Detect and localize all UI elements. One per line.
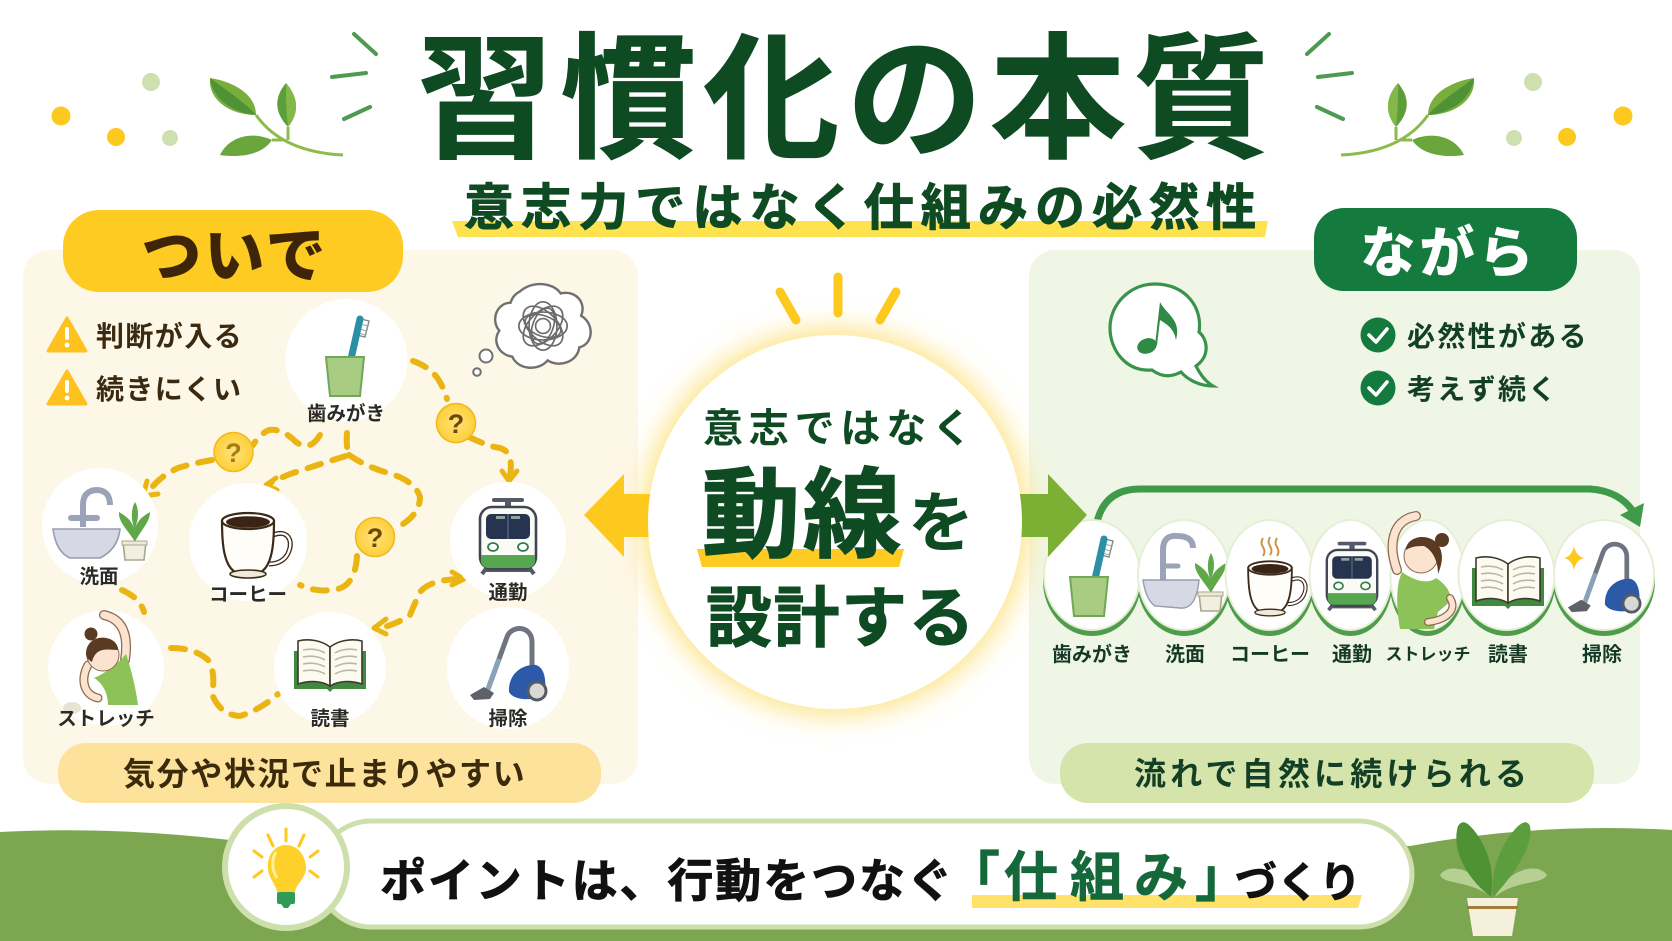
question mark 2 bbox=[214, 432, 253, 472]
flow node: 洗面 bbox=[1138, 520, 1230, 630]
icon: light bulb bbox=[225, 806, 347, 928]
subtitle highlight bbox=[452, 221, 1268, 237]
warning item 2 bbox=[48, 371, 242, 405]
node: ストレッチ bbox=[48, 610, 164, 730]
node: ストレッチ: ストレッチ bbox=[57, 708, 155, 730]
flow node: ストレッチ bbox=[1390, 516, 1464, 630]
icon: tangled thought cloud bbox=[473, 284, 591, 376]
arrow: right to ながら bbox=[1019, 474, 1087, 557]
node: 洗面: 洗面 bbox=[79, 566, 119, 588]
icon: right leaf sprig bbox=[1341, 78, 1474, 156]
question mark 3: ? bbox=[367, 523, 383, 553]
check item 2: 考えず続く bbox=[1407, 374, 1559, 405]
center circle message bbox=[648, 277, 1022, 709]
flow labels: 掃除 bbox=[1582, 643, 1622, 666]
node: 通勤 bbox=[450, 482, 566, 604]
highlight under 動線 bbox=[697, 549, 904, 567]
panel: ついで bbox=[23, 210, 638, 803]
decoration: title rays left bbox=[332, 34, 376, 119]
flow labels: 歯みがき bbox=[1052, 642, 1132, 666]
decoration: title rays right bbox=[1307, 34, 1352, 119]
question mark 2: ? bbox=[225, 438, 242, 468]
flow node: コーヒー bbox=[1226, 520, 1314, 630]
flow node: 掃除 bbox=[1554, 520, 1654, 630]
panel background bbox=[1029, 250, 1640, 784]
flow labels bbox=[1052, 642, 1622, 666]
center glow bbox=[641, 328, 1029, 716]
flow labels: 読書 bbox=[1488, 643, 1528, 666]
warning item 2: 続きにくい bbox=[96, 374, 242, 405]
caption: 気分や状況で止まりやすい bbox=[58, 743, 601, 803]
node: 通勤: 通勤 bbox=[488, 582, 528, 604]
heading: ついで bbox=[63, 210, 403, 292]
flow labels: ストレッチ bbox=[1386, 645, 1470, 664]
panel: ながら bbox=[1029, 208, 1655, 803]
heading: ついで: ついで bbox=[141, 223, 329, 290]
node: 読書 bbox=[274, 612, 386, 730]
bottom green ground band bbox=[0, 828, 1672, 941]
flow node: 読書 bbox=[1458, 520, 1554, 630]
footer key word: 「仕組み」 bbox=[946, 848, 1249, 908]
node: 歯みがき: 歯みがき bbox=[307, 402, 385, 425]
line 2 particle: を bbox=[908, 486, 974, 560]
line 2: 動線 bbox=[702, 460, 904, 570]
caption: 流れで自然に続けられる bbox=[1060, 743, 1594, 803]
flow node: 通勤 bbox=[1310, 520, 1392, 630]
arrow: left to ついで bbox=[584, 474, 652, 557]
decoration: right sparkle dots bbox=[1506, 73, 1632, 146]
flow arrow over the row bbox=[1097, 489, 1644, 527]
icon: left leaf sprig bbox=[210, 78, 343, 156]
question mark 3 bbox=[356, 518, 394, 556]
line 1: 意志ではなく bbox=[703, 407, 978, 451]
flow node: 歯みがき bbox=[1044, 520, 1140, 630]
route: tangled dashed paths bbox=[122, 361, 517, 716]
question mark 1: ? bbox=[448, 409, 464, 439]
footer pill bbox=[318, 821, 1412, 927]
subtitle: 意志力ではなく仕組みの必然性 bbox=[464, 180, 1263, 236]
flow labels: コーヒー bbox=[1230, 644, 1310, 666]
icon: potted plant bbox=[1440, 822, 1547, 936]
warning item 1: 判断が入る bbox=[96, 320, 243, 352]
panel background bbox=[23, 250, 638, 784]
heading: ながら: ながら bbox=[1360, 222, 1538, 284]
warning item 1 bbox=[48, 318, 243, 352]
icon: music speech bubble bbox=[1110, 284, 1213, 386]
node: コーヒー: コーヒー bbox=[209, 584, 287, 606]
caption: 流れで自然に続けられる: 流れで自然に続けられる bbox=[1134, 756, 1531, 792]
footer text end: づくり bbox=[1235, 859, 1361, 906]
caption: 気分や状況で止まりやすい: 気分や状況で止まりやすい bbox=[123, 756, 526, 792]
flow labels: 洗面 bbox=[1165, 643, 1205, 666]
line 3: 設計する bbox=[706, 581, 976, 655]
title: 習慣化の本質 bbox=[417, 24, 1276, 176]
node: 掃除: 掃除 bbox=[488, 707, 528, 730]
check item 1: 必然性がある bbox=[1407, 320, 1589, 352]
flow row: green scallops bbox=[1043, 526, 1655, 636]
node: 掃除 bbox=[447, 607, 569, 730]
node: 歯みがき bbox=[286, 299, 408, 425]
decoration: left sparkle dots bbox=[52, 73, 178, 146]
node: 読書: 読書 bbox=[310, 707, 350, 730]
flow labels: 通勤 bbox=[1332, 643, 1372, 666]
node: コーヒー bbox=[189, 483, 307, 606]
check item 2 bbox=[1360, 370, 1559, 406]
idea rays bbox=[780, 277, 896, 320]
node: 洗面 bbox=[42, 468, 158, 588]
heading: ながら bbox=[1314, 208, 1577, 291]
footer text: ポイントは、行動をつなぐ bbox=[380, 855, 955, 907]
footer highlight bbox=[972, 895, 1362, 908]
question mark 1 bbox=[436, 404, 476, 442]
